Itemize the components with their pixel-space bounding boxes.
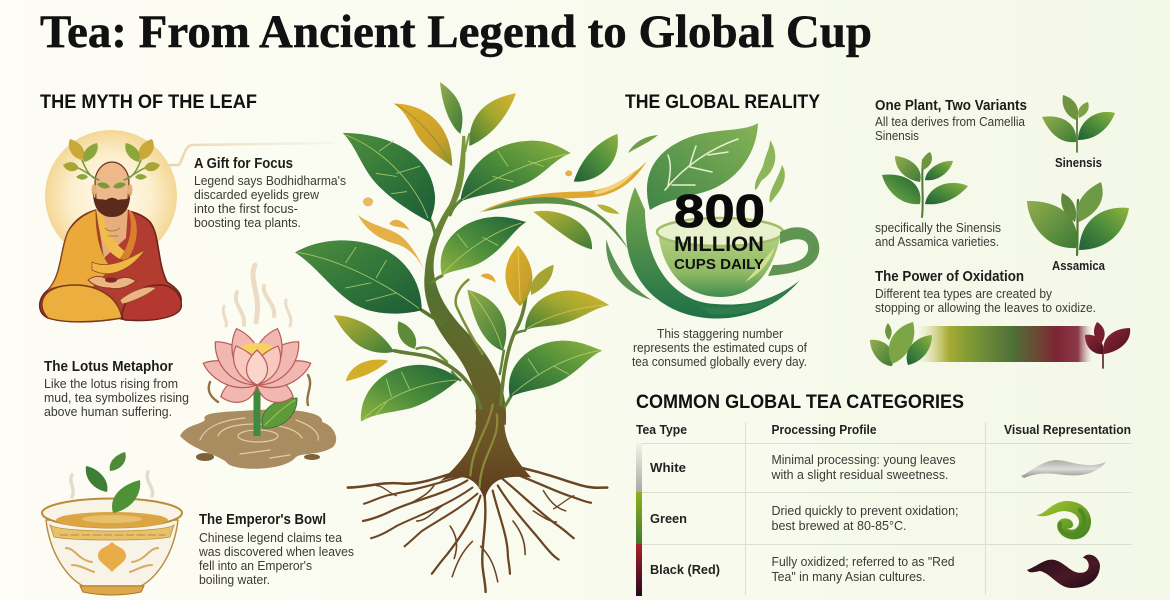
olive lower left leaf	[334, 315, 394, 353]
roots	[348, 465, 607, 592]
row: black: Black (Red)	[650, 562, 720, 577]
text: the lotus metaphor: The Lotus Metaphor	[44, 359, 173, 375]
text: the emperor's bowl: The Emperor's Bowl	[199, 512, 326, 528]
row: black: Fully oxidized; referred to as "Red	[772, 555, 955, 569]
table header	[636, 422, 1131, 437]
oxidation gradient bar	[917, 326, 1092, 362]
table grid	[636, 422, 1132, 595]
text: a gift for focus: into the first focus-	[194, 202, 298, 216]
central tea tree illustration	[295, 82, 652, 592]
panel: common global tea categories	[636, 392, 1132, 596]
floating leaf center	[533, 211, 592, 249]
floating leaf upper	[574, 134, 618, 182]
icon: assamica sprig	[1027, 182, 1129, 255]
icon: black tea leaf	[1027, 555, 1100, 588]
heading: categories: COMMON GLOBAL TEA CATEGORIES	[636, 392, 964, 413]
icon: green tea curl	[1036, 501, 1091, 539]
row: white: Minimal processing: young leaves	[772, 453, 956, 467]
label: sinensis: Sinensis	[1055, 155, 1102, 170]
text: variants intro	[875, 98, 1027, 143]
text: stat description: This staggering number	[657, 327, 783, 341]
row: green	[636, 492, 1091, 545]
text: variants description: and Assamica varieties.	[875, 235, 999, 249]
small top leaf	[440, 82, 462, 134]
row: green: Dried quickly to prevent oxidation;	[772, 504, 958, 518]
panel: one plant two variants	[870, 95, 1130, 368]
big right leaf	[460, 141, 571, 202]
text: the lotus metaphor: Like the lotus rising from	[44, 377, 178, 391]
illustration: lotus in mud	[180, 265, 336, 469]
title: Tea: From Ancient Legend to Global Cup	[40, 6, 872, 58]
trunk	[440, 410, 531, 500]
stat: 800 million cups daily: 800	[674, 185, 765, 237]
icon: second sprig	[882, 152, 968, 217]
text: a gift for focus: A Gift for Focus	[194, 156, 293, 172]
big left leaf	[295, 240, 422, 314]
icon: white tea leaf	[1021, 460, 1106, 478]
text: power of oxidation: Different tea types are created by	[875, 287, 1053, 301]
row: black	[636, 544, 1100, 596]
row: white: with a slight residual sweetness.	[771, 468, 948, 482]
text: variants description	[875, 221, 1001, 249]
heading: global reality: THE GLOBAL REALITY	[625, 92, 820, 113]
text: a gift for focus: discarded eyelids grew	[194, 188, 320, 202]
text: variants intro: All tea derives from Camellia	[875, 115, 1025, 129]
row: green: best brewed at 80-85°C.	[772, 519, 906, 533]
top right leaf	[469, 93, 516, 146]
panel: the myth of the leaf	[40, 92, 354, 595]
lower left big leaf	[361, 365, 459, 422]
stat: 800 million cups daily: CUPS DAILY	[674, 256, 764, 273]
row: white: White	[650, 460, 686, 475]
gold wisps	[358, 161, 652, 300]
illustration: emperor's bowl	[42, 452, 182, 595]
row: green: Green	[650, 511, 687, 526]
icon: green leaves	[870, 322, 932, 366]
text: stat description: represents the estimated cups of	[633, 341, 807, 355]
leaf upper left	[343, 133, 435, 222]
row: white	[636, 443, 1106, 493]
text: a gift for focus: boosting tea plants.	[194, 216, 301, 230]
text: the emperor's bowl	[198, 512, 354, 587]
panel: the global reality	[625, 92, 820, 369]
gold small leaf	[346, 360, 388, 381]
stat: 800 million cups daily: MILLION	[674, 233, 764, 256]
text: a gift for focus	[194, 156, 346, 230]
gold upright leaf	[505, 245, 532, 306]
illustration: meditating Bodhidharma	[40, 130, 181, 322]
table header: Tea Type	[636, 422, 687, 437]
row: black: Tea" in many Asian cultures.	[772, 570, 926, 584]
icon: sinensis sprig	[1042, 95, 1115, 152]
text: the emperor's bowl: fell into an Emperor's	[199, 559, 312, 573]
small olive leaf	[398, 321, 416, 349]
text: power of oxidation	[875, 269, 1096, 315]
text: a gift for focus: Legend says Bodhidharma's	[194, 174, 346, 188]
table header: Processing Profile	[772, 422, 876, 437]
text: stat description	[632, 327, 807, 369]
illustration: tea cup with leaf	[626, 123, 819, 319]
text: the emperor's bowl: boiling water.	[199, 573, 270, 587]
stat: 800 million cups daily	[674, 185, 765, 273]
icon: red leaves	[1085, 322, 1130, 368]
text: power of oxidation: The Power of Oxidation	[875, 269, 1024, 285]
right gold-green leaf	[525, 291, 609, 330]
middle right leaf	[441, 217, 526, 276]
heading: myth: THE MYTH OF THE LEAF	[40, 92, 257, 113]
small upright leaf	[531, 265, 554, 295]
text: the lotus metaphor: mud, tea symbolizes rising	[44, 391, 189, 405]
text: the emperor's bowl: Chinese legend claims tea	[199, 531, 342, 545]
text: variants intro: One Plant, Two Variants	[875, 98, 1027, 114]
text: stat description: tea consumed globally every day.	[632, 355, 807, 369]
text: the lotus metaphor	[44, 359, 189, 419]
text: variants intro: Sinensis	[875, 129, 919, 143]
text: the emperor's bowl: was discovered when leaves	[198, 545, 354, 559]
gold leaf	[393, 103, 452, 166]
text: the lotus metaphor: above human suffering.	[44, 405, 172, 419]
center leaf	[467, 290, 506, 351]
label: assamica: Assamica	[1052, 258, 1106, 273]
stems	[394, 134, 526, 425]
connector line	[170, 143, 333, 165]
text: power of oxidation: stopping or allowing the leaves to oxidize.	[875, 301, 1096, 315]
lower right big leaf	[509, 341, 602, 397]
table header: Visual Representation	[1004, 422, 1131, 437]
text: variants description: specifically the Sinensis	[875, 221, 1001, 235]
